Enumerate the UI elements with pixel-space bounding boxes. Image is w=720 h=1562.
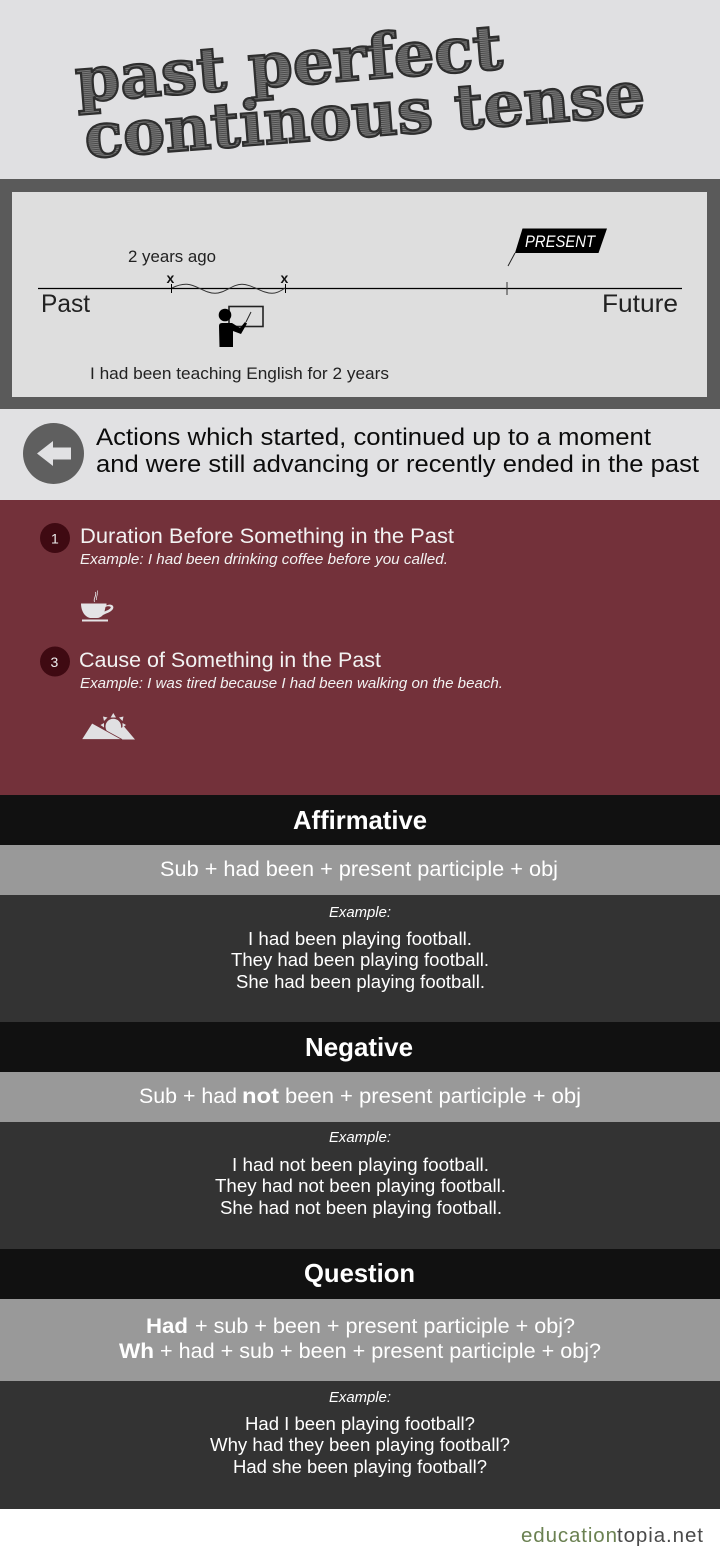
panel: definition xyxy=(0,409,720,500)
flag: present xyxy=(508,228,607,266)
negative examples xyxy=(0,1122,720,1249)
question formula: + sub + been + present participle + obj? xyxy=(195,1314,575,1338)
question examples: Example: xyxy=(329,1390,391,1406)
affirmative heading xyxy=(0,795,720,845)
affirmative examples: She had been playing football. xyxy=(236,972,485,992)
question formula: + had + sub + been + present participle + obj? xyxy=(160,1339,601,1363)
title banner xyxy=(0,0,720,179)
question examples xyxy=(0,1381,720,1509)
title line 2: continous tense xyxy=(82,57,647,173)
icon: back arrow xyxy=(23,423,84,484)
negative formula xyxy=(0,1072,720,1122)
question examples: Had she been playing football? xyxy=(233,1457,487,1477)
label: Future: Future xyxy=(602,290,678,318)
affirmative formula xyxy=(0,845,720,895)
use 1 number badge: 1 xyxy=(51,530,59,546)
affirmative examples: I had been playing football. xyxy=(248,929,472,949)
use 3 heading: Cause of Something in the Past xyxy=(79,649,381,672)
end marker x: x xyxy=(280,270,288,286)
timeline axis xyxy=(38,282,682,295)
question formula: Wh xyxy=(119,1339,154,1363)
section: negative xyxy=(0,1022,720,1249)
footer: brand xyxy=(0,1509,720,1562)
use 1 example: Example: I had been drinking coffee before you called. xyxy=(80,551,448,568)
use 1 heading: Duration Before Something in the Past xyxy=(80,525,454,548)
label: Past: Past xyxy=(41,290,90,318)
question heading xyxy=(0,1249,720,1299)
title line 1: past perfect xyxy=(72,11,505,117)
affirmative examples: They had been playing football. xyxy=(231,950,489,970)
negative examples: She had not been playing football. xyxy=(220,1198,502,1218)
definition line 1: Actions which started, continued up to a moment xyxy=(96,424,651,451)
icon: coffee cup xyxy=(81,590,113,622)
negative formula: been + present participle + obj xyxy=(285,1084,581,1108)
question examples: Why had they been playing football? xyxy=(210,1435,510,1455)
definition line 2: and were still advancing or recently ended in the past xyxy=(96,451,699,478)
question formula: Had xyxy=(146,1314,188,1338)
flag: present: PRESENT xyxy=(525,233,597,251)
icon: teacher at board xyxy=(219,306,263,347)
negative examples: Example: xyxy=(329,1130,391,1146)
label: 2 years ago: 2 years ago xyxy=(128,247,216,266)
affirmative examples xyxy=(0,895,720,1022)
negative examples: They had not been playing football. xyxy=(215,1176,506,1196)
use 3 number badge xyxy=(40,646,70,676)
affirmative formula: Sub + had been + present participle + obj xyxy=(160,857,558,881)
panel: timeline xyxy=(0,179,720,409)
question heading: Question xyxy=(304,1258,415,1288)
caption: example sentence: I had been teaching English for 2 years xyxy=(90,364,389,383)
affirmative examples: Example: xyxy=(329,905,391,921)
panel: uses xyxy=(0,500,720,795)
negative heading: Negative xyxy=(305,1032,413,1062)
question examples: Had I been playing football? xyxy=(245,1414,475,1434)
use 3 example: Example: I was tired because I had been walking on the beach. xyxy=(80,675,503,692)
section: affirmative xyxy=(0,795,720,1022)
section: question xyxy=(0,1249,720,1509)
negative formula: Sub + had xyxy=(139,1084,237,1108)
footer: brand: topia.net xyxy=(617,1524,703,1547)
start marker x: x xyxy=(166,270,174,286)
footer: brand: education xyxy=(521,1524,617,1547)
use 3 number badge: 3 xyxy=(50,654,58,670)
negative heading xyxy=(0,1022,720,1072)
negative examples: I had not been playing football. xyxy=(232,1155,489,1175)
affirmative heading: Affirmative xyxy=(293,805,427,835)
use 1 number badge xyxy=(40,523,70,553)
icon: sun over mountains xyxy=(82,713,135,740)
question formula xyxy=(0,1299,720,1381)
negative formula: not xyxy=(242,1084,279,1108)
